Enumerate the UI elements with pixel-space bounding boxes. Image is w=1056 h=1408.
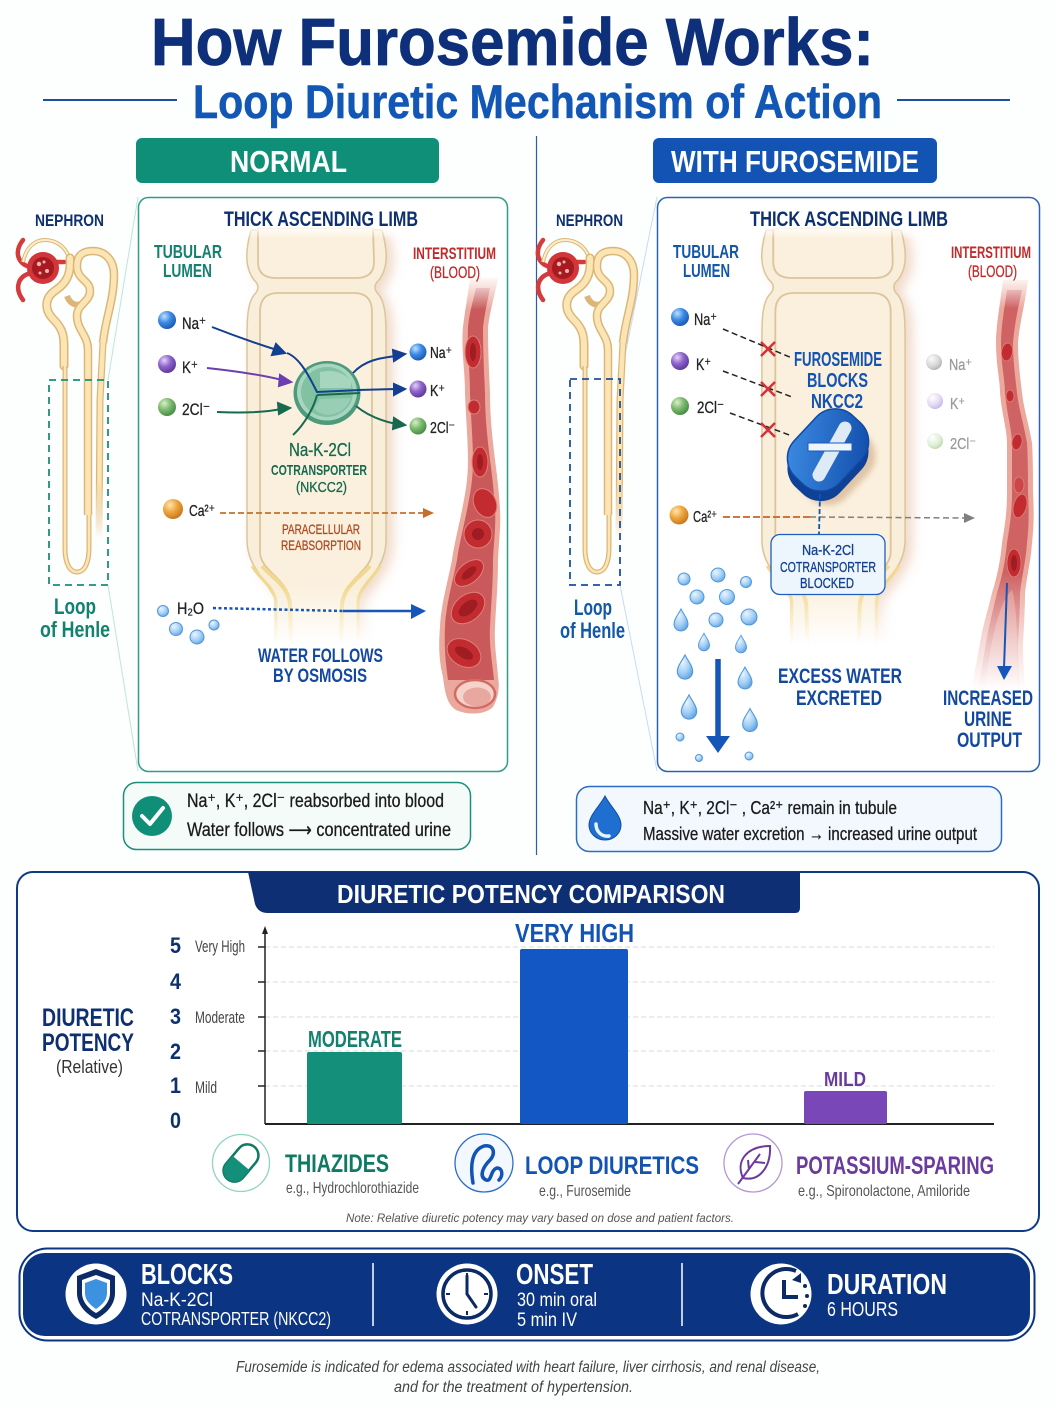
gray faded ions [926,354,976,453]
legend: thiazides [212,1134,419,1197]
label: excess water excreted [778,665,902,710]
ions entering: Na⁺ [182,314,206,333]
badge: normal: NORMAL [230,144,347,179]
summary: furosemide: Massive water excretion → increased urine output [643,823,977,844]
y axis labels: Mild [195,1078,217,1097]
icon: loop [455,1134,513,1192]
icon: pill [777,398,886,516]
label: tubular lumen: LUMEN [163,261,212,281]
callout: cotransporter blocked [771,534,885,594]
axes [258,926,994,1124]
gray faded ions: 2Cl⁻ [950,436,976,453]
panel: potency comparison [17,872,1039,1231]
label: tubular lumen [154,242,222,281]
axis title: POTENCY [42,1029,134,1057]
label: tubular lumen: TUBULAR [673,242,739,262]
summary: normal: Na⁺, K⁺, 2Cl⁻ reabsorbed into blood [187,791,444,812]
legend: thiazides: e.g., Hydrochlorothiazide [286,1180,419,1197]
panel: normal thick ascending limb [138,198,508,772]
arrow: urine output [997,583,1012,680]
bar: thiazides: MODERATE [308,1026,402,1052]
title: How Furosemide Works: [151,5,874,80]
heading: thick ascending limb: THICK ASCENDING LIMB [224,208,418,231]
subtitle: Loop Diuretic Mechanism of Action [193,75,882,128]
arrows out of transporter [353,350,405,429]
panel: normal nephron overview [18,197,138,771]
footer note [236,1359,820,1396]
heading: thick ascending limb: THICK ASCENDING LIMB [750,208,948,231]
label: cotransporter: COTRANSPORTER [271,462,367,479]
y axis labels: Very High [195,937,245,956]
blocked ion paths [723,329,792,437]
label: furosemide blocks NKCC2: NKCC2 [811,391,863,413]
summary: normal [124,782,470,850]
calcium paracellular route: REABSORPTION [281,537,361,553]
label: cotransporter [271,440,367,496]
panel: furosemide nephron overview: NEPHRON [556,211,623,230]
fact: onset: 30 min oral [517,1290,597,1311]
calcium paracellular route [163,499,434,553]
legend: potassium-sparing [724,1134,994,1200]
y axis labels: 4 [170,969,182,994]
label: water follows by osmosis: WATER FOLLOWS [258,646,383,667]
footer note: Furosemide is indicated for edema associated with heart failure, liver cirrhosis, and renal disease, [236,1359,820,1376]
footer note: and for the treatment of hypertension. [394,1379,633,1396]
y axis labels: 3 [170,1004,181,1029]
ions exiting: 2Cl⁻ [430,420,455,437]
bar: thiazides [307,1026,402,1124]
label: water follows by osmosis: BY OSMOSIS [273,666,367,687]
panel: furosemide thick ascending limb [658,198,1040,772]
banner: key facts [20,1248,1034,1340]
chart note: Note: Relative diuretic potency may vary based on dose and patient factors. [346,1211,734,1225]
water droplets [674,568,757,762]
arrows into transporter [207,327,291,414]
calcium paracellular route: PARACELLULAR [282,521,360,537]
label: excess water excreted: EXCRETED [796,687,882,710]
icon: capsule [212,1134,270,1192]
bar chart [170,918,994,1133]
arrow: water excreted [706,659,730,753]
icon: duration clock [750,1264,812,1324]
fact: onset: 5 min IV [517,1310,577,1331]
fact: blocks: COTRANSPORTER (NKCC2) [141,1309,331,1329]
legend: thiazides: THIAZIDES [285,1150,389,1178]
heading tab [248,872,800,913]
label: excess water excreted: EXCESS WATER [778,665,902,688]
label: furosemide blocks NKCC2: BLOCKS [807,370,868,392]
panel: furosemide nephron overview: of Henle [560,618,625,643]
blood vessel [970,280,1034,700]
panel: normal nephron overview: Loop [54,594,96,619]
label: water follows by osmosis [258,646,383,687]
ions entering: 2Cl⁻ [697,398,724,417]
y axis labels: 0 [170,1108,181,1133]
ions entering: 2Cl⁻ [182,400,210,419]
summary: furosemide: Na⁺, K⁺, 2Cl⁻ , Ca²⁺ remain in tubule [643,797,897,818]
gray faded ions: K⁺ [950,396,965,413]
y axis labels: 5 [170,933,181,958]
icon: check [132,796,172,836]
fact: onset: ONSET [516,1259,593,1291]
red blood cells [1000,342,1029,577]
label: tubular lumen: TUBULAR [154,242,222,262]
label: increased urine output: OUTPUT [957,729,1022,752]
bar: potassium-sparing: MILD [824,1069,866,1091]
fact: blocks [66,1259,331,1329]
blood vessel [439,278,500,714]
icon: water drop [589,796,621,840]
icon: clock [436,1264,498,1324]
legend: potassium-sparing: POTASSIUM-SPARING [796,1152,994,1180]
icon: shield [66,1264,126,1324]
ions entering: K⁺ [696,355,711,374]
label: cotransporter: (NKCC2) [296,479,347,496]
badge: normal [136,138,439,183]
ions exiting: K⁺ [430,383,445,400]
label: interstitium: INTERSTITIUM [413,244,496,263]
axis title: DIURETIC [42,1004,134,1032]
legend: loop diuretics: LOOP DIURETICS [525,1152,699,1180]
panel: normal nephron overview: NEPHRON [35,211,104,230]
label: interstitium [951,243,1031,281]
callout: cotransporter blocked: COTRANSPORTER [780,559,876,576]
axis title: (Relative) [56,1057,123,1077]
callout: cotransporter blocked: Na-K-2Cl [802,542,854,559]
vessel opening [455,680,495,708]
label: tubular lumen: LUMEN [683,261,730,281]
ions exiting [410,344,455,437]
legend: potassium-sparing: e.g., Spironolactone, Amiloride [798,1183,970,1200]
bar: loop diuretics [515,918,634,1124]
label: tubular lumen [673,242,739,281]
label: increased urine output [943,687,1033,752]
fact: blocks: BLOCKS [141,1259,233,1291]
ions entering: K⁺ [182,358,198,377]
panel: furosemide nephron overview [538,197,657,771]
label: cotransporter: Na-K-2Cl [289,440,351,460]
water osmosis route: H₂O [177,599,204,618]
badge: with furosemide: WITH FUROSEMIDE [671,144,919,179]
ions exiting: Na⁺ [430,345,452,362]
gray faded ions: Na⁺ [949,357,972,374]
ions entering [671,308,724,417]
fact: duration [750,1264,947,1324]
callout: cotransporter blocked: BLOCKED [800,575,854,592]
legend: loop diuretics [455,1134,699,1200]
fact: duration: DURATION [827,1269,947,1301]
bar: potassium-sparing [804,1069,887,1124]
y axis labels: 1 [170,1073,181,1098]
calcium route [670,506,975,526]
icon: leaf [724,1134,782,1192]
y axis labels: Moderate [195,1008,245,1027]
label: interstitium: (BLOOD) [430,263,480,282]
calcium route: Ca²⁺ [693,509,717,526]
label: interstitium [413,244,496,282]
ions entering: Na⁺ [694,310,717,329]
y axis labels [170,933,245,1133]
axis title [42,1004,134,1077]
summary: furosemide [576,786,1002,852]
label: increased urine output: URINE [964,708,1012,731]
summary: normal: Water follows ⟶ concentrated urine [187,820,451,841]
fact: blocks: Na-K-2Cl [141,1290,213,1311]
label: interstitium: (BLOOD) [968,262,1017,281]
cell: tubule [247,228,393,649]
water osmosis route [158,599,426,644]
fact: duration: 6 HOURS [827,1299,898,1321]
panel: furosemide nephron overview: Loop [574,595,612,620]
ions entering [158,311,210,419]
y axis labels: 2 [170,1039,181,1064]
red blood cells [442,336,501,673]
bar: loop diuretics: VERY HIGH [515,918,634,948]
label: furosemide blocks NKCC2: FUROSEMIDE [794,349,882,371]
transporter: NKCC2 [287,353,360,435]
calcium paracellular route: Ca²⁺ [189,503,215,520]
panel: normal nephron overview: of Henle [40,617,110,642]
badge: with furosemide [653,138,937,183]
fact: onset [436,1259,597,1331]
heading tab: DIURETIC POTENCY COMPARISON [337,879,725,909]
cell: tubule [762,228,912,649]
legend: loop diuretics: e.g., Furosemide [539,1183,631,1200]
label: furosemide blocks NKCC2 [794,349,882,413]
